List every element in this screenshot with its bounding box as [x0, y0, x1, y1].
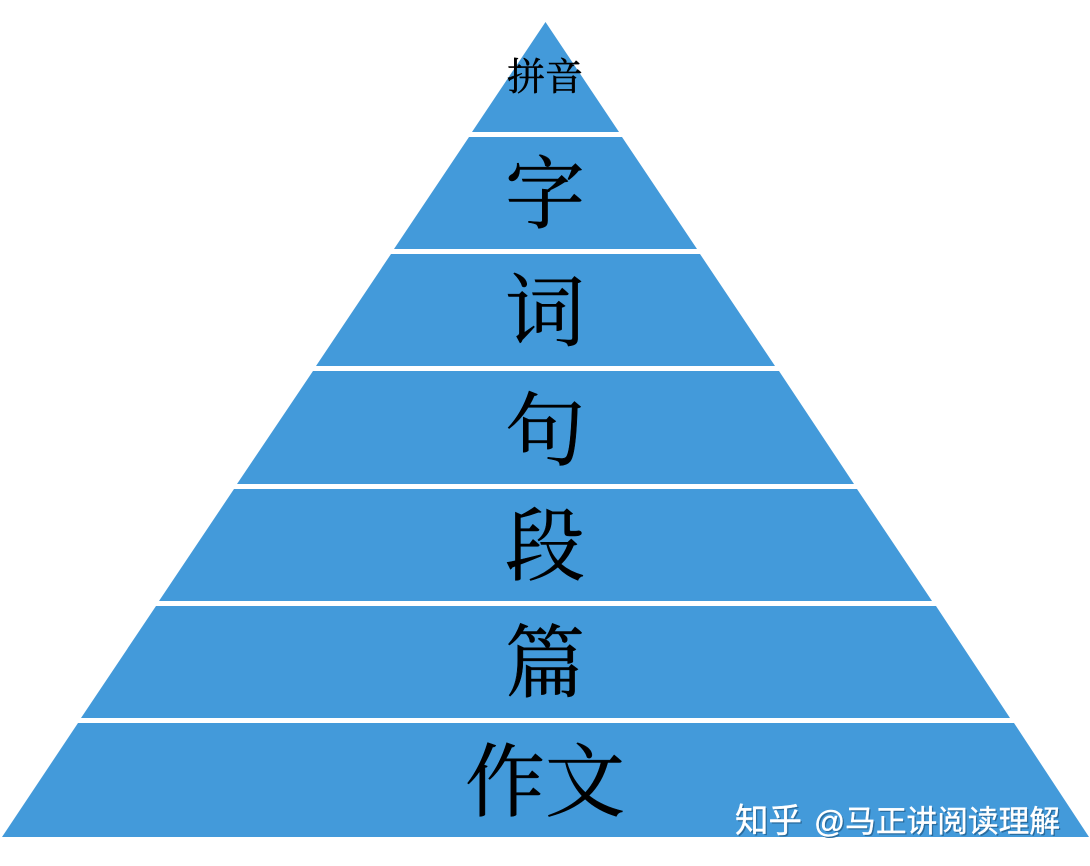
- watermark: @马正讲阅读理解: [816, 806, 1061, 840]
- tier 1: pinyin: 拼音: [507, 57, 583, 99]
- tier 4: sentence: 句: [505, 389, 585, 477]
- tier 5: paragraph: [159, 489, 932, 601]
- tier 3: word: [316, 254, 775, 366]
- tier 6: passage: [81, 606, 1010, 718]
- tier 5: paragraph: 段: [505, 504, 585, 592]
- tier 6: passage: 篇: [505, 621, 585, 709]
- watermark: [735, 803, 1061, 842]
- tier 7: composition: [2, 723, 1089, 837]
- watermark: 知乎: [735, 803, 802, 840]
- tier 2: character: [394, 137, 697, 249]
- tier 7: composition: 作文: [465, 740, 625, 828]
- tier 3: word: 词: [505, 270, 585, 358]
- watermark: @马正讲阅读理解: [814, 804, 1060, 839]
- tier 1: pinyin: [472, 22, 619, 132]
- tier 2: character: 字: [505, 152, 585, 240]
- tier 4: sentence: [237, 371, 854, 484]
- watermark: 知乎: [736, 804, 804, 842]
